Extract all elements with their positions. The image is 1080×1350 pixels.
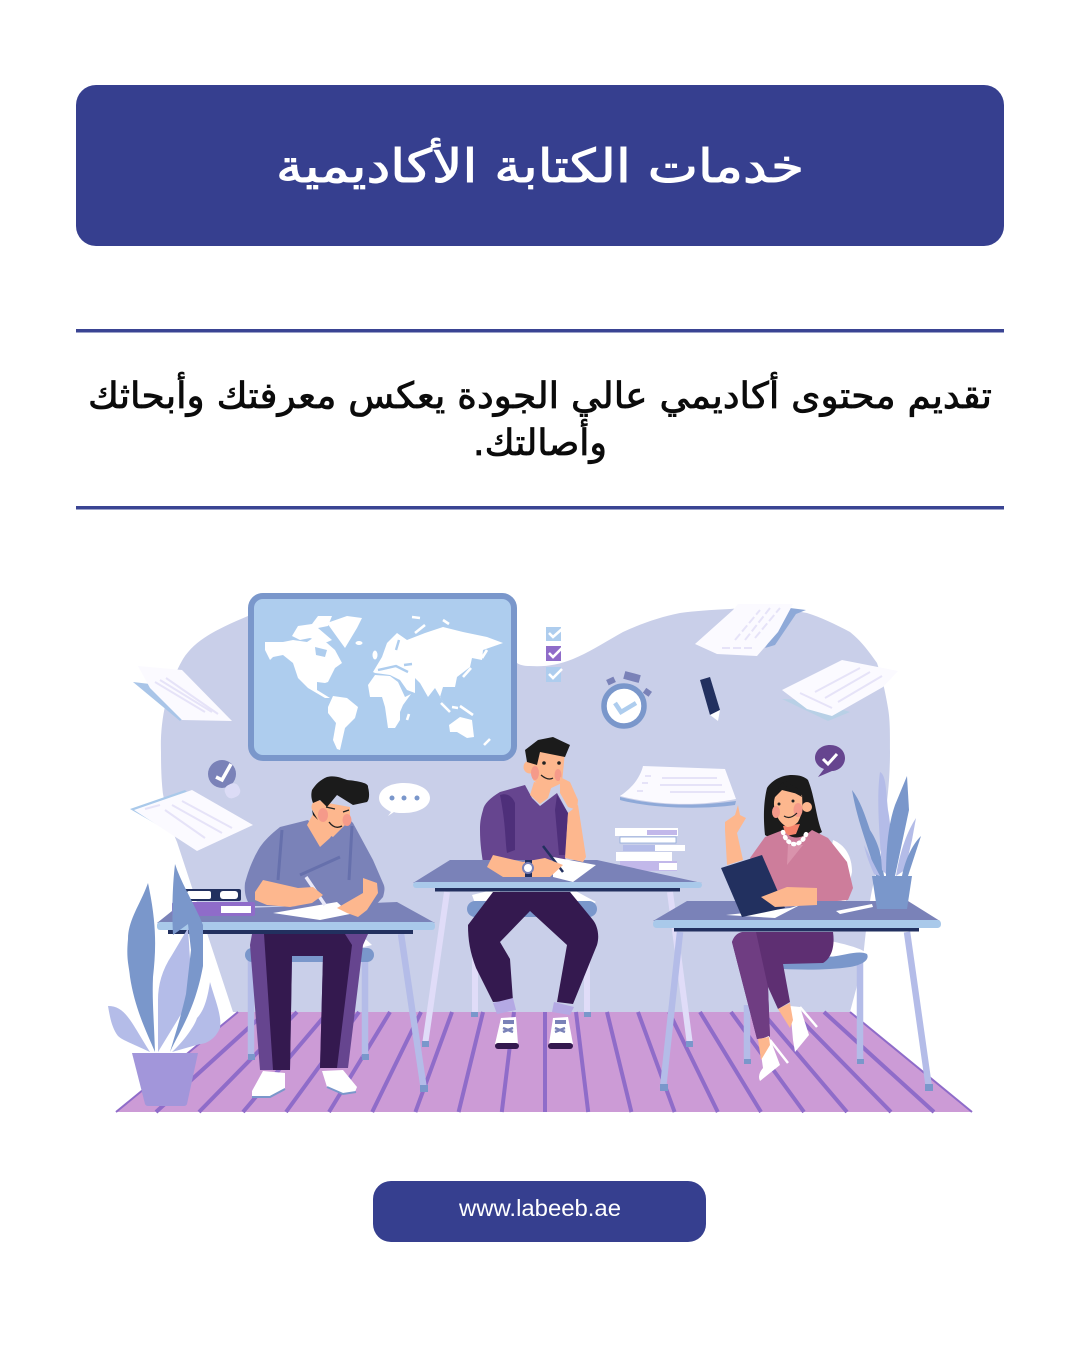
woman neck and face [783, 824, 800, 836]
man 2 head [530, 782, 552, 804]
man 1 shoes [252, 1070, 357, 1098]
desk 2 with seated man [413, 737, 702, 1049]
high heels [758, 1003, 817, 1081]
title text: خدمات الكتابة الأكاديمية [276, 137, 804, 193]
folder [721, 855, 785, 917]
desk 3 with seated woman [653, 775, 941, 1091]
paper: right [782, 660, 898, 721]
potted plant left [108, 864, 220, 1106]
chair 3 [744, 840, 868, 1064]
icon: stopwatch [604, 671, 652, 726]
book stack [615, 828, 685, 871]
man 2 arms [487, 855, 563, 877]
man 1 arms [255, 880, 323, 907]
desk 2 top [413, 860, 702, 883]
paper and pen on desk 3 [726, 905, 800, 918]
subtitle text block [88, 372, 992, 464]
world map [251, 596, 514, 758]
icon: pencil [700, 677, 720, 721]
sneakers [495, 1017, 573, 1049]
paper and pen on desk 2 [553, 857, 596, 882]
pot [132, 1053, 198, 1106]
subtitle text block: تقديم محتوى أكاديمي عالي الجودة يعكس معرفتك وأبحاثك [88, 372, 992, 417]
illustration: students writing at desks [108, 596, 972, 1112]
paper and pen on desk 1 [273, 902, 350, 920]
floor [116, 1012, 972, 1112]
man 1 shirt [245, 815, 384, 906]
desk 1 top [157, 902, 435, 923]
man 2 shirt [480, 785, 568, 870]
woman top [750, 830, 853, 903]
woman trousers [732, 932, 834, 1039]
desk 2 legs [425, 892, 690, 1045]
paper: centre [620, 766, 736, 808]
man 1 head [307, 805, 345, 847]
paper: lower left [130, 790, 253, 851]
man 1 trousers [250, 934, 368, 1070]
desk 1 with writing man [157, 776, 435, 1098]
website pill [373, 1181, 706, 1242]
paper: upper left [133, 666, 232, 721]
raised arm and hand [725, 805, 746, 865]
man 2 hand on cheek [560, 777, 578, 810]
title banner [76, 85, 1004, 246]
icon: checklist boxes [546, 627, 562, 682]
woman hair back [764, 775, 822, 850]
website url: www.labeeb.ae [458, 1195, 621, 1221]
subtitle text block: وأصالتك. [473, 419, 607, 464]
man 2 pants [468, 892, 598, 1004]
pearl necklace [783, 832, 807, 844]
potted plant right [852, 772, 921, 909]
wristwatch [523, 860, 533, 877]
background blob [161, 608, 890, 1012]
chair 1 [245, 934, 374, 1060]
chair 2 [467, 888, 597, 1017]
woman hand on folder [761, 887, 817, 907]
desk 1 right leg [401, 934, 424, 1090]
cuffs [493, 998, 516, 1014]
binders [172, 889, 255, 916]
icon: light bulb with check [208, 760, 242, 800]
speech bubble [379, 783, 430, 816]
paper: top right [695, 604, 806, 656]
icon: check speech bubble [815, 745, 845, 777]
pot [872, 876, 912, 909]
desk 3 top [653, 901, 940, 921]
